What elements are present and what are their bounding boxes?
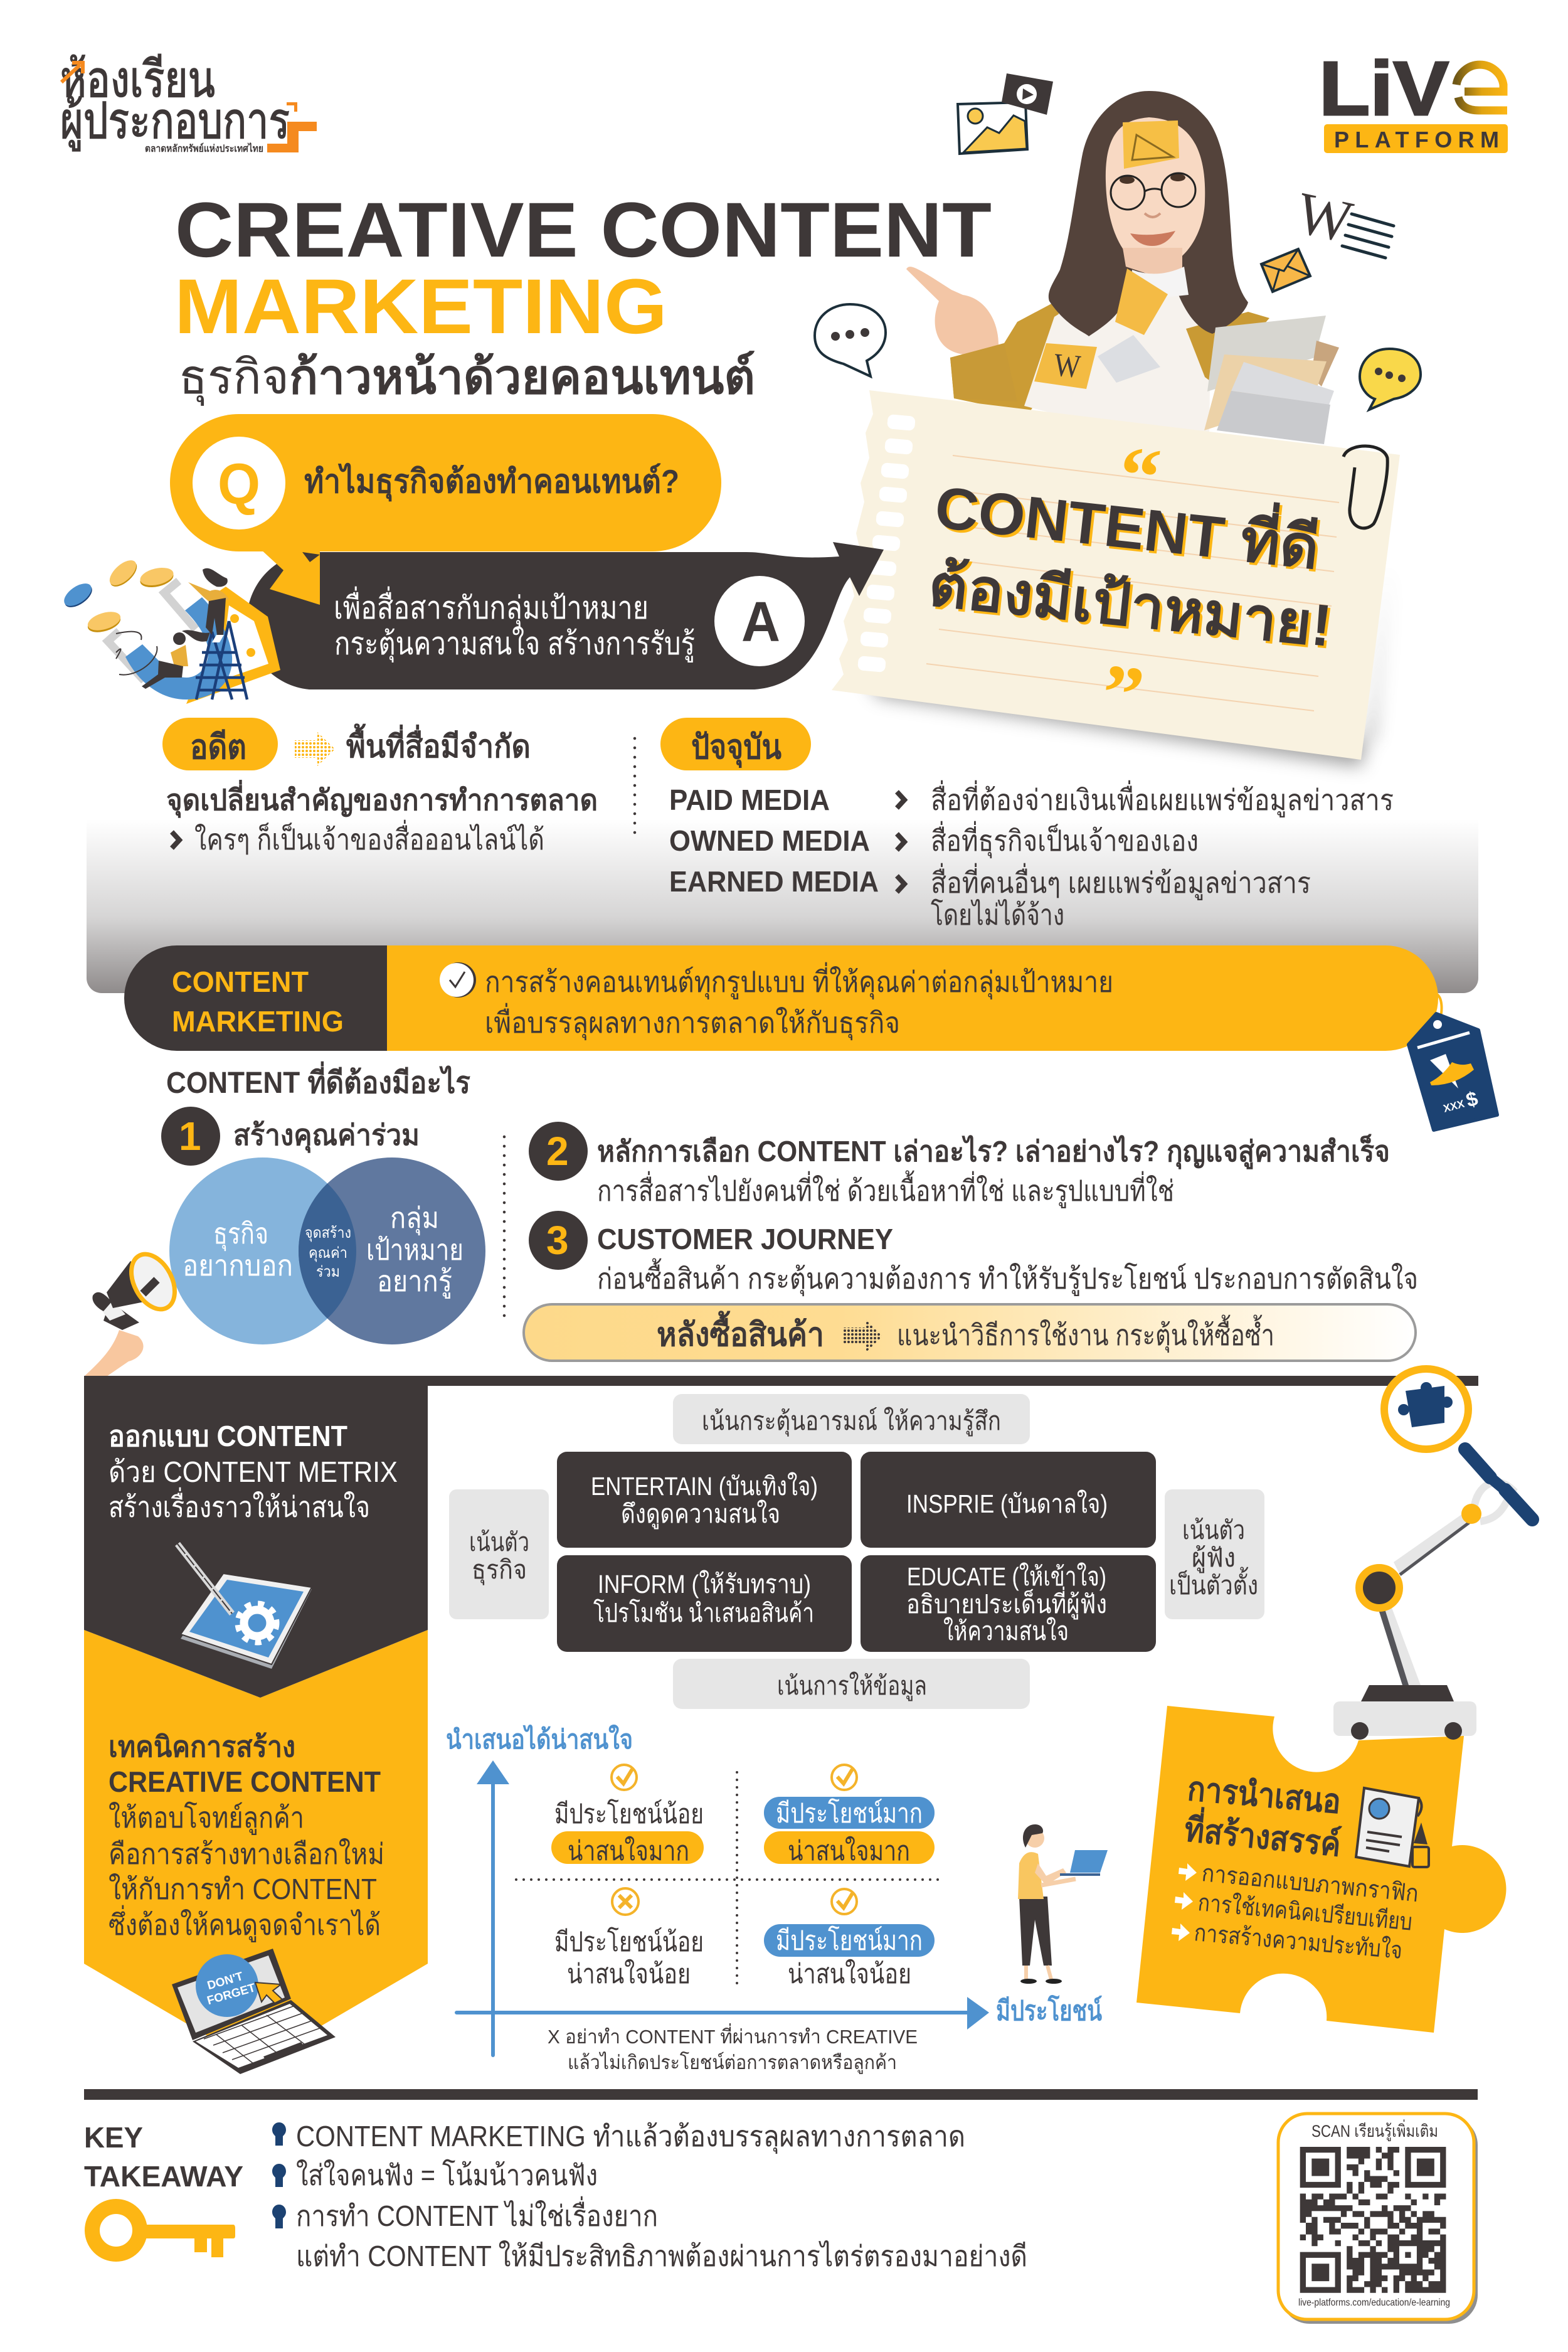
cell: entertain: ENTERTAIN (บันเทิงใจ) [591,1472,818,1501]
venn diagram: เป้าหมาย [366,1233,464,1266]
creative content technique text: ให้ตอบโจทย์ลูกค้า [109,1801,304,1835]
item 3: customer journey: ก่อนซื้อสินค้า กระตุ้นความต้องการ ทำให้รับรู้ประโยชน์ ประกอบการตัดสินใจ [597,1258,1418,1297]
panel: present media types: สื่อที่คนอื่นๆ เผยแพร่ข้อมูลข่าวสาร [931,863,1311,900]
panel: past: จุดเปลี่ยนสำคัญของการทำการตลาด [166,780,598,818]
answer bubble with arrow [246,542,884,689]
panel: design with content matrix: ด้วย CONTENT METRIX [109,1455,398,1488]
icon: W document: W [1291,179,1358,255]
venn diagram [169,1157,485,1344]
panel: present media types [660,718,1394,931]
A badge [714,576,805,666]
creative content technique text: ซึ่งต้องให้คนดูจดจำเราได้ [109,1905,381,1942]
cell: educate: EDUCATE (ให้เข้าใจ) [907,1562,1106,1591]
cell: inspire [861,1452,1156,1548]
logo: Live Platform: PLATFORM [1334,127,1499,152]
illustration: person with laptop [1018,1824,1108,1984]
key takeaway heading [84,2121,243,2193]
answer text: เพื่อสื่อสารกับกลุ่มเป้าหมาย [334,587,649,627]
quadrant: high benefit high interest [764,1765,935,1866]
puzzle heading: ที่สร้างสรรค์ [1183,1805,1343,1864]
icon: price tag [1409,993,1497,1130]
item 1: shared value: 1 [179,1114,201,1159]
venn diagram: อยากรู้ [377,1265,452,1299]
cell: inform: โปรโมชัน นำเสนอสินค้า [593,1599,814,1627]
QR code card [1278,2114,1478,2324]
panel: present media types: ปัจจุบัน [691,728,781,769]
item 2: content selection [529,1122,1390,1208]
panel: present media types: สื่อที่ธุรกิจเป็นเจ้าของเอง [931,821,1199,859]
illustration: robot arm with magnifier [1333,1369,1532,1736]
logo: ห้องเรียนผู้ประกอบการ: ตลาดหลักทรัพย์แห่งประเทศไทย [145,142,263,154]
note headline: CONTENT ที่ดี [935,468,1326,583]
chart footnote: X อย่าทำ CONTENT ที่ผ่านการทำ CREATIVE [548,2023,918,2048]
note holes [857,414,916,673]
quadrant: high benefit low interest: น่าสนใจน้อย [788,1959,911,1989]
content matrix: ผู้ฟัง [1192,1543,1236,1573]
title: Creative Content Marketing: CREATIVE CONTENT [175,187,992,274]
question text: ทำไมธุรกิจต้องทำคอนเทนต์? [304,462,679,502]
logo: ห้องเรียนผู้ประกอบการ: ผู้ประกอบการ [60,93,290,151]
QR code card: live-platforms.com/education/e-learning [1298,2297,1450,2308]
quadrant: low benefit low interest: น่าสนใจน้อย [567,1959,691,1989]
panel: present media types: โดยไม่ได้จ้าง [931,898,1064,931]
title: Creative Content Marketing [174,187,992,406]
key takeaway heading: TAKEAWAY [84,2160,243,2193]
quadrant: high benefit low interest: มีประโยชน์มาก [776,1925,923,1956]
heading: what good content needs: CONTENT ที่ดีต้องมีอะไร [166,1061,470,1100]
puzzle bullets [1172,1860,1420,1964]
A badge: A [741,591,780,654]
QR code card: SCAN เรียนรู้เพิ่มเติม [1311,2119,1438,2141]
item 3: customer journey: 3 [546,1218,569,1263]
content matrix: เป็นตัวตั้ง [1169,1567,1258,1600]
note headline: CONTENT ที่ดี [932,466,1323,581]
banner: content marketing definition: เพื่อบรรลุผลทางการตลาดให้กับธุรกิจ [485,1003,900,1041]
quadrant: low benefit high interest: มีประโยชน์น้อย [554,1799,704,1829]
item 1: shared value: สร้างคุณค่าร่วม [233,1119,420,1153]
venn diagram: คุณค่า [309,1245,347,1262]
quadrant: low benefit high interest: น่าสนใจมาก [568,1836,689,1866]
content matrix: เน้นตัว [469,1528,529,1556]
illustration: magnet, coins and two women on ladder [60,556,280,704]
icon: W document [1291,179,1394,258]
panel: past [162,718,598,856]
panel: present media types: EARNED MEDIA [669,865,879,898]
panel: present media types: สื่อที่ต้องจ่ายเงินเพื่อเผยแพร่ข้อมูลข่าวสาร [931,780,1394,817]
venn diagram: ธุรกิจ [213,1217,268,1252]
after purchase pill: หลังซื้อสินค้า [657,1311,824,1353]
title: Creative Content Marketing: ก้าวหน้าด้วยคอนเทนต์ [289,351,755,404]
grey gradient panel [87,721,1478,993]
icon: envelope [1261,249,1310,292]
chart: benefit vs interest quadrant: มีประโยชน์ [996,1994,1102,2026]
cell: entertain: ดึงดูดความสนใจ [621,1499,780,1530]
panel: present media types: OWNED MEDIA [669,824,870,857]
panel: past: พื้นที่สื่อมีจำกัด [346,723,531,764]
Q badge [193,437,285,529]
chart footnote [548,2023,918,2074]
chart: benefit vs interest quadrant: นำเสนอได้น่าสนใจ [446,1724,633,1754]
icon: picture and video [958,73,1053,154]
cell: inform [557,1555,852,1652]
puzzle heading [1183,1770,1343,1864]
key takeaway bullets: การทำ CONTENT ไม่ใช่เรื่องยาก [296,2196,658,2232]
quadrant: low benefit low interest: มีประโยชน์น้อย [554,1927,704,1957]
banner: content marketing definition [124,945,1438,1051]
cell: inform: INFORM (ให้รับทราบ) [598,1570,811,1599]
item 3: customer journey: CUSTOMER JOURNEY [597,1223,893,1255]
icon: tablet with gear [177,1544,312,1669]
item 2: content selection: หลักการเลือก CONTENT เล่าอะไร? เล่าอย่างไร? กุญแจสู่ความสำเร็จ [597,1134,1390,1169]
cell: educate [861,1555,1156,1652]
creative content technique text [109,1730,384,1942]
icon: price tag: XXX [1442,1098,1466,1115]
logo: ห้องเรียนผู้ประกอบการ: ห้องเรียน [60,51,215,107]
panel: design with content matrix: สร้างเรื่องราวให้น่าสนใจ [109,1487,370,1523]
creative content technique text: CREATIVE CONTENT [109,1765,381,1798]
after purchase pill [524,1304,1416,1361]
banner: content marketing definition: MARKETING [172,1005,344,1038]
cell: entertain [557,1452,852,1548]
creative content technique text: เทคนิคการสร้าง [109,1730,295,1763]
section rule [84,2089,1478,2100]
item 1: shared value [161,1107,420,1166]
icon: yellow speech bubble [1360,349,1421,410]
content matrix: ธุรกิจ [472,1555,527,1585]
banner: content marketing definition: CONTENT [172,966,309,998]
content matrix [449,1394,1264,1709]
quadrant: low benefit low interest [554,1888,704,1989]
icon: price tag: $ [1463,1087,1480,1112]
title: Creative Content Marketing: MARKETING [174,263,667,350]
icon: laptop don't forget: FORGET [206,1981,257,2008]
puzzle heading: การนำเสนอ [1186,1770,1342,1821]
venn diagram: จุดสร้าง [305,1225,351,1242]
quote marks [1098,429,1165,742]
puzzle bullets: การออกแบบภาพกราฟิก [1200,1860,1420,1907]
creative content technique text: คือการสร้างทางเลือกใหม่ [109,1838,384,1870]
title: Creative Content Marketing: ธุรกิจ [179,351,289,406]
icon: document and pen [1356,1788,1429,1867]
note headline [926,466,1337,661]
cell: educate: อธิบายประเด็นที่ผู้ฟัง [906,1587,1107,1620]
note headline: ต้องมีเป้าหมาย! [926,551,1335,659]
QR code [1300,2147,1446,2293]
answer text [334,587,695,662]
quadrant: high benefit high interest: น่าสนใจมาก [788,1836,910,1866]
logo: ห้องเรียนผู้ประกอบการ [60,51,317,154]
panel: design with content matrix [84,1376,428,2074]
icon: megaphone with hand [84,1247,184,1376]
quote marks: ” [1098,647,1148,742]
icon: laptop don't forget [172,1949,336,2074]
icon: outlined speech bubble [815,304,886,376]
venn diagram: ร่วม [316,1264,340,1280]
logo: Live Platform: LiV [1319,46,1449,131]
panel: present media types: PAID MEDIA [669,784,830,816]
question bubble [170,414,721,605]
key takeaway bullets: แต่ทำ CONTENT ให้มีประสิทธิภาพต้องผ่านการไตร่ตรองมาอย่างดี [296,2240,1027,2272]
logo: Live Platform [1319,46,1508,153]
key takeaway bullets [272,2120,1027,2272]
photo: woman with sticky notes and folders: W [1052,347,1082,385]
panel: past: อดีต [190,728,246,766]
section rule [84,1376,1478,1386]
chart: benefit vs interest quadrant [446,1724,1102,2074]
key takeaway bullets: CONTENT MARKETING ทำแล้วต้องบรรลุผลทางการตลาด [296,2120,965,2154]
paperclip [1343,446,1387,528]
key takeaway heading: KEY [84,2121,143,2154]
quote marks: “ [1115,429,1165,523]
after purchase pill: แนะนำวิธีการใช้งาน กระตุ้นให้ซื้อซ้ำ [897,1314,1274,1353]
item 2: content selection: 2 [546,1129,569,1174]
photo: woman with sticky notes and folders [906,91,1339,444]
quote note paper [832,390,1400,767]
icon: laptop don't forget: DON'T [206,1970,245,1993]
quadrant: high benefit low interest [764,1889,935,1989]
magnifier with puzzle piece [1384,1369,1468,1449]
cell: educate: ให้ความสนใจ [943,1617,1069,1646]
content matrix: เน้นการให้ข้อมูล [777,1671,927,1701]
item 3: customer journey [529,1211,1418,1297]
icon: key [92,2206,235,2257]
quadrant: low benefit high interest [551,1765,704,1866]
icon: check [440,962,476,998]
answer text: กระตุ้นความสนใจ สร้างการรับรู้ [334,626,695,662]
banner: content marketing definition: การสร้างคอนเทนต์ทุกรูปแบบ ที่ให้คุณค่าต่อกลุ่มเป้าหมาย [485,962,1113,1000]
quadrant: high benefit high interest: มีประโยชน์มาก [776,1798,923,1829]
venn diagram: กลุ่ม [390,1201,439,1236]
puzzle panel: creative presentation [1136,1706,1506,2033]
content matrix: เน้นตัว [1182,1516,1245,1545]
panel: design with content matrix: ออกแบบ CONTENT [109,1420,347,1452]
note headline: ต้องมีเป้าหมาย! [928,554,1337,661]
key takeaway bullets: ใส่ใจคนฟัง = โน้มน้าวคนฟัง [296,2159,598,2191]
creative content technique text: ให้กับการทำ CONTENT [109,1873,377,1905]
Q badge: Q [218,452,260,516]
venn diagram: อยากบอก [183,1249,293,1282]
puzzle bullets: การสร้างความประทับใจ [1193,1919,1404,1964]
panel: past: ใครๆ ก็เป็นเจ้าของสื่อออนไลน์ได้ [194,819,544,856]
item 2: content selection: การสื่อสารไปยังคนที่ใช่ ด้วยเนื้อหาที่ใช่ และรูปแบบที่ใช่ [597,1170,1174,1208]
cell: inspire: INSPRIE (บันดาลใจ) [906,1489,1108,1518]
content matrix: เน้นกระตุ้นอารมณ์ ให้ความรู้สึก [702,1407,1001,1437]
puzzle bullets: การใช้เทคนิคเปรียบเทียบ [1197,1889,1414,1936]
chart footnote: แล้วไม่เกิดประโยชน์ต่อการตลาดหรือลูกค้า [568,2051,897,2074]
